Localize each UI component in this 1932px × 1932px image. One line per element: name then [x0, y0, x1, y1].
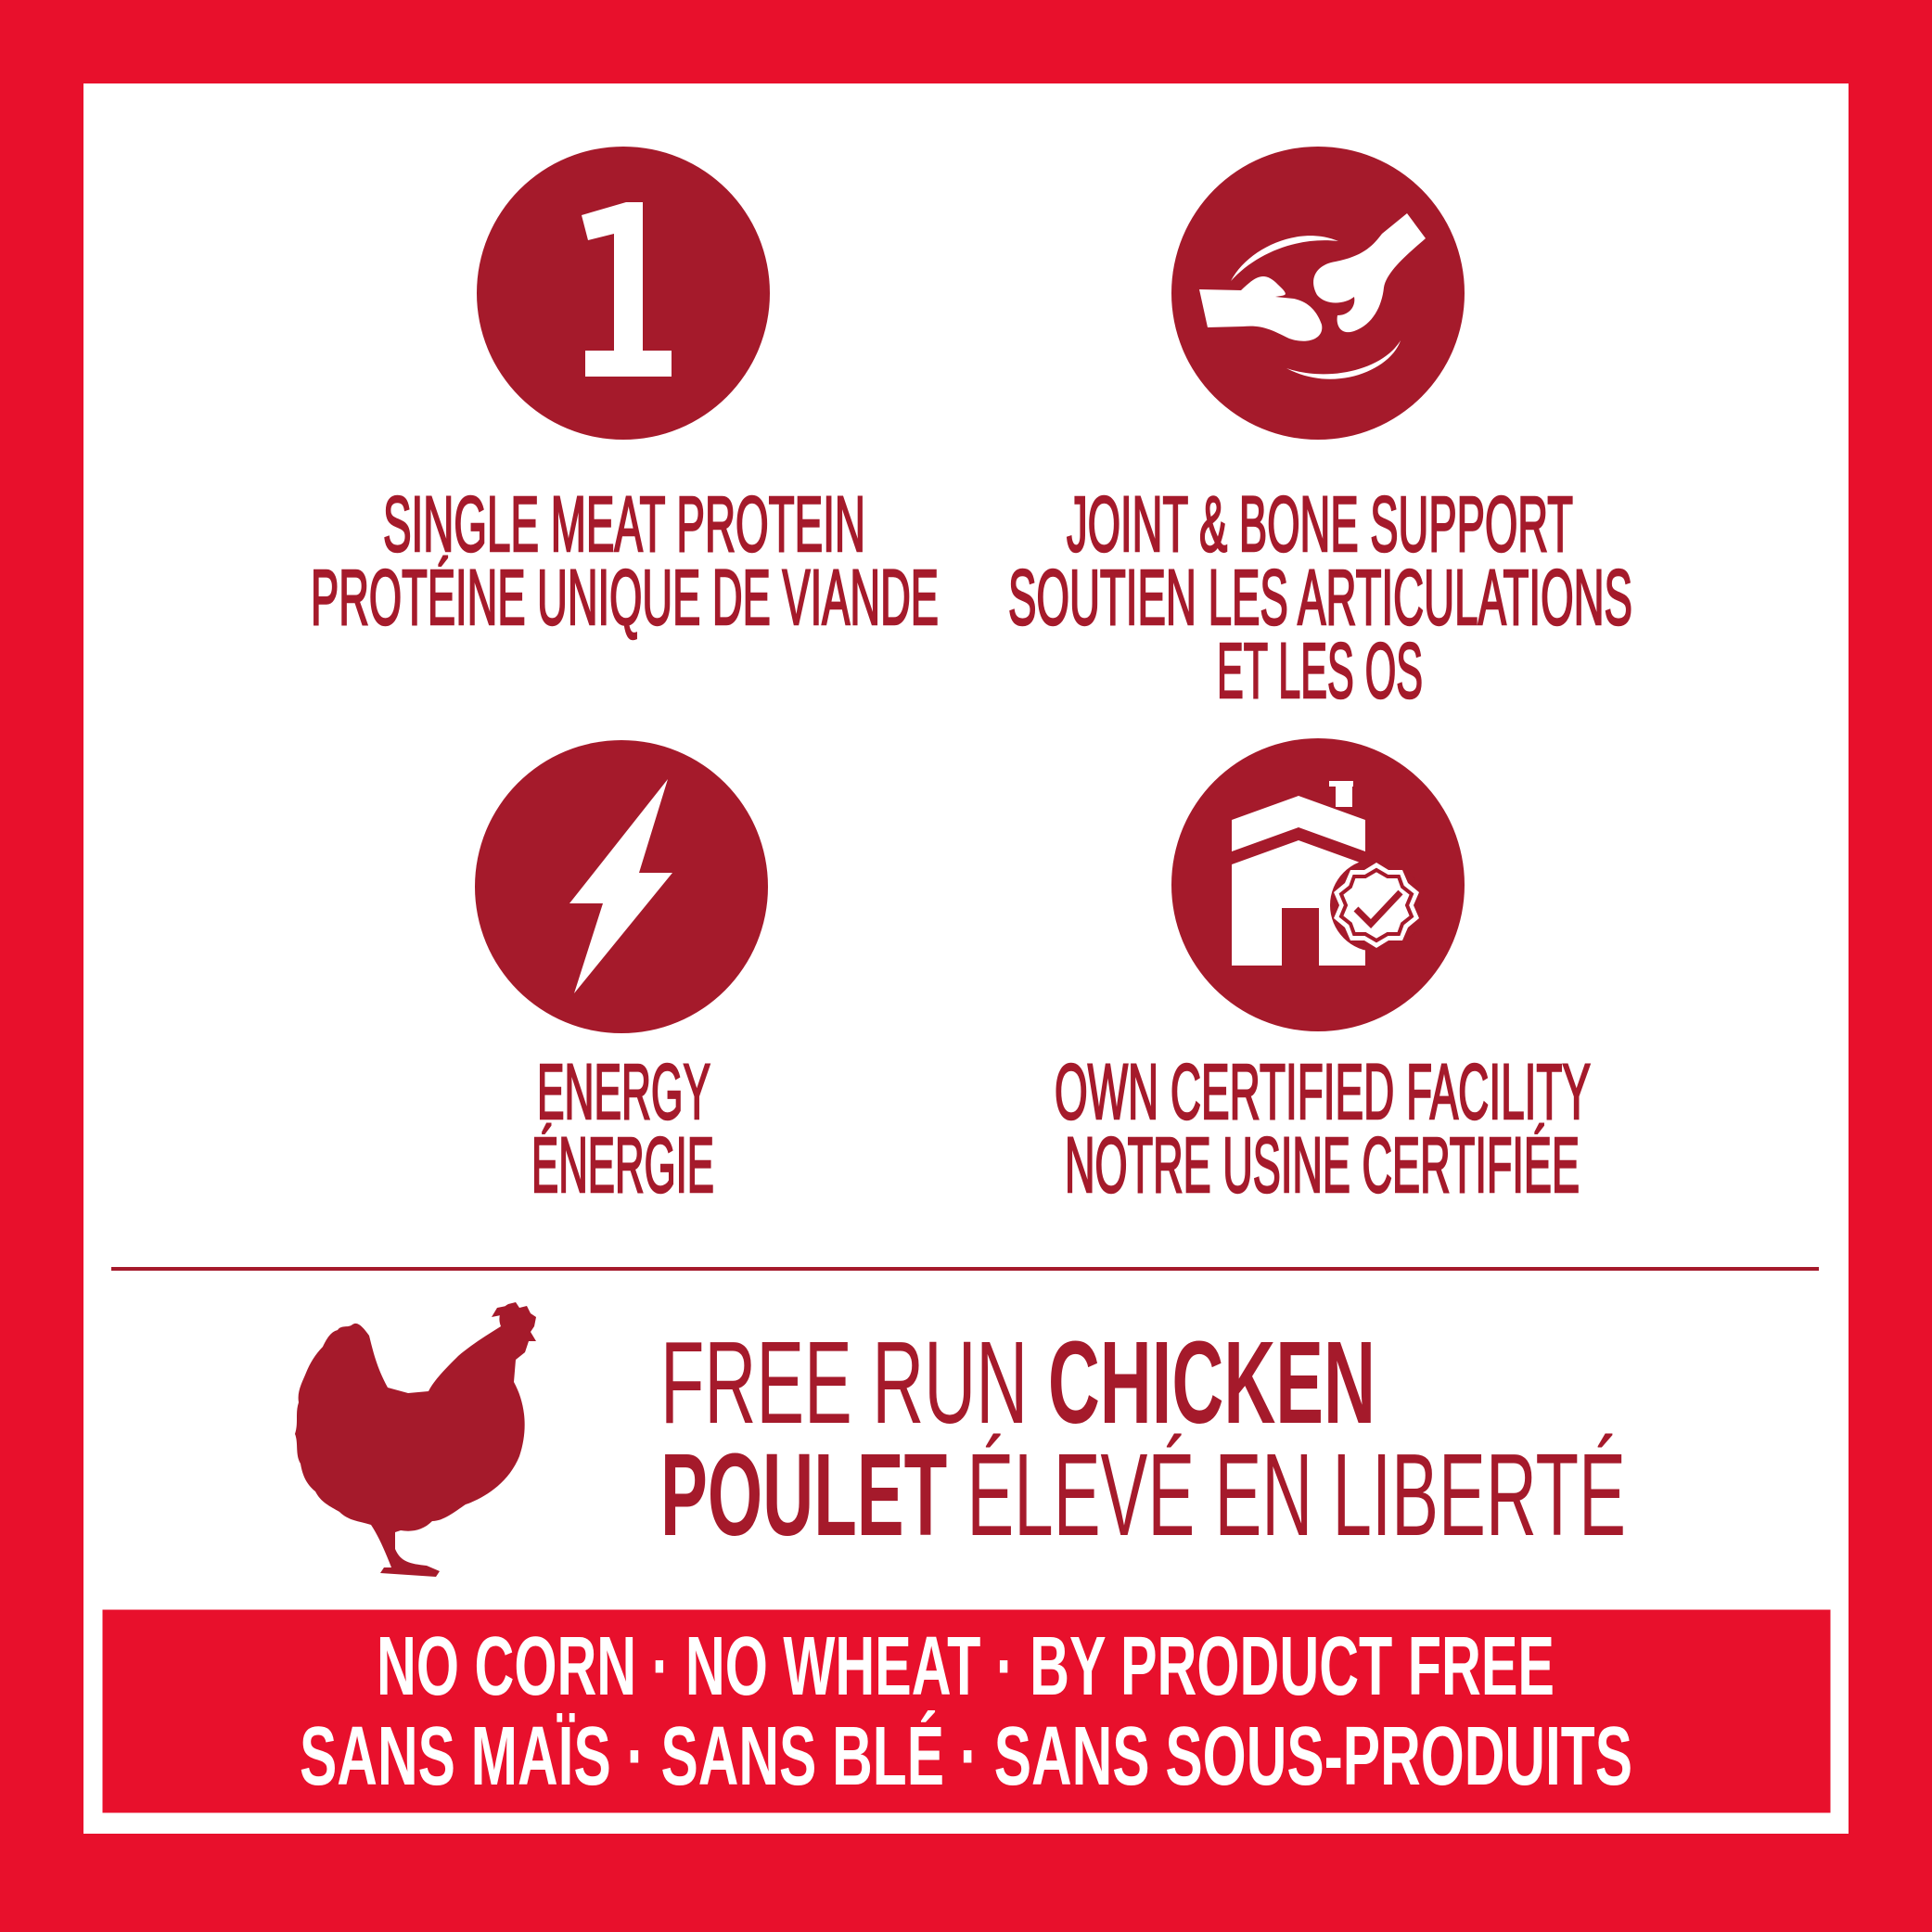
text: joint and bone support — [1008, 480, 1632, 714]
text: energy: ÉNERGIE — [531, 1121, 714, 1209]
text: joint and bone support: ET LES OS — [1217, 627, 1423, 714]
icon: joint and bone — [1171, 147, 1465, 440]
text: own certified facility — [1055, 1048, 1591, 1209]
icon: number one — [477, 147, 770, 440]
text: single meat protein: PROTÉINE UNIQUE DE VIANDE — [311, 554, 939, 641]
text: free run chicken — [660, 1317, 1626, 1560]
text: energy: ENERGY — [537, 1048, 710, 1135]
banner: no corn no wheat — [100, 1607, 1833, 1815]
text: free run chicken: FREE RUN CHICKEN — [660, 1317, 1375, 1448]
icon: chicken — [295, 1302, 536, 1577]
icon: energy lightning — [475, 740, 768, 1033]
text: single meat protein: SINGLE MEAT PROTEIN — [383, 480, 865, 568]
icon: certified facility — [1171, 738, 1465, 1031]
text: single meat protein — [311, 480, 939, 641]
text: energy — [531, 1048, 714, 1209]
